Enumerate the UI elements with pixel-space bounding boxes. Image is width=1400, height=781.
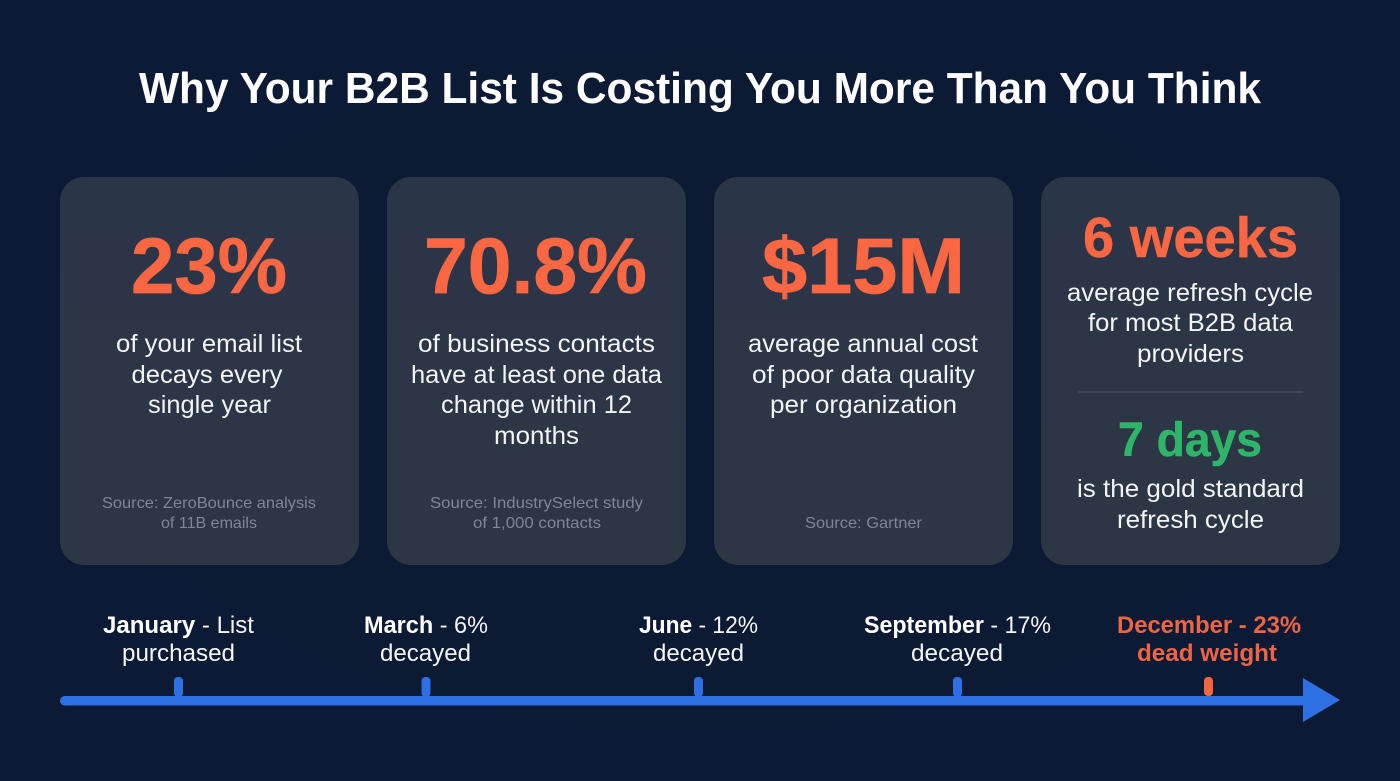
source: IndustrySelect [430,495,643,532]
stat: 23%: 23% [131,221,287,310]
label: January: January - List [103,612,254,639]
description: gold standard: refresh cycle [1117,506,1264,534]
label: June: June - 12% [639,612,758,639]
description: contact change [411,330,662,450]
source: ZeroBounce [102,495,316,532]
label: December: dead weight [1137,640,1277,667]
label: March: March - 6% [364,612,488,639]
description: average refresh [1067,279,1313,368]
description: average refresh: average refresh cycle [1067,279,1313,307]
source: ZeroBounce: Source: ZeroBounce analysis [102,495,316,512]
label: September: decayed [911,640,1003,667]
panel: refresh cycle [1041,177,1340,565]
source: ZeroBounce: of 11B emails [161,515,257,532]
label: March: decayed [380,640,471,667]
description: annual cost: of poor data quality [752,361,976,389]
description: email decay: of your email list [116,330,302,358]
label: December: December - 23% [1117,612,1301,639]
description: contact change: change within 12 [441,391,632,419]
stat: 6 weeks: 6 weeks [1083,206,1298,270]
description: email decay [116,330,302,419]
tick: March [422,677,430,697]
stat: 7 days: 7 days [1118,414,1262,467]
label: June: decayed [653,640,744,667]
source: Gartner: Source: Gartner [805,515,923,532]
tick: June [694,677,703,697]
label: January: purchased [122,640,235,667]
label: December [1117,612,1301,667]
description: contact change: of business contacts [418,330,655,358]
label: January [103,612,254,667]
label: March [364,612,488,667]
tick: September [953,677,962,697]
source: IndustrySelect: of 1,000 contacts [473,515,601,532]
description: gold standard [1077,475,1304,534]
stat: 70.8%: 70.8% [424,221,647,310]
description: email decay: single year [148,391,271,419]
source: IndustrySelect: Source: IndustrySelect study [430,495,643,512]
stat: $15M: $15M [762,221,965,310]
description: contact change: months [494,422,579,450]
panel: $15M cost [714,177,1013,565]
timeline [60,612,1340,722]
label: September [864,612,1051,667]
timeline arrow [60,678,1340,722]
description: annual cost [748,330,978,419]
description: average refresh: for most B2B data [1088,309,1293,337]
label: September: September - 17% [864,612,1051,639]
panel: 70.8% contact change [387,177,686,565]
panel: 23% email decay [60,177,359,565]
tick: January [174,677,183,697]
description: gold standard: is the gold standard [1077,475,1304,503]
description: email decay: decays every [132,361,283,389]
title: Why Your B2B List Is Costing You More Than You Think [139,64,1262,113]
tick: December [1204,677,1213,696]
description: annual cost: average annual cost [748,330,978,358]
description: contact change: have at least one data [411,361,662,389]
description: annual cost: per organization [770,391,957,419]
label: June [639,612,758,667]
description: average refresh: providers [1137,340,1244,368]
